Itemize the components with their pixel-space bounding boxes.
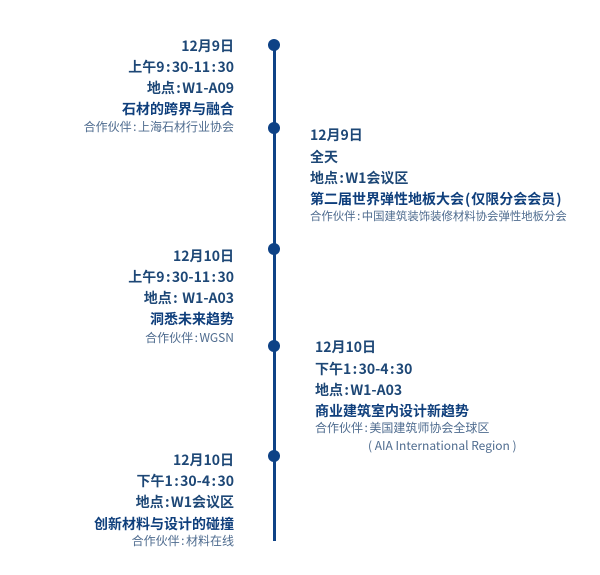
event 5: innovative materials: 合作伙伴:材料在线 bbox=[132, 532, 234, 549]
event 5: innovative materials: 12月10日 bbox=[173, 450, 234, 470]
event 1: stone materials: 地点:W1-A09 bbox=[147, 78, 234, 98]
event 2: elastic flooring conference: 12月9日 bbox=[310, 125, 363, 145]
event 5: innovative materials: 下午1:30-4:30 bbox=[137, 471, 234, 491]
event 5: innovative materials bbox=[94, 450, 234, 549]
event 4: commercial interior design bbox=[315, 337, 517, 454]
event 3: future trends bbox=[128, 246, 234, 346]
event 2: elastic flooring conference: 第二届世界弹性地板大会(仅限分会会员) bbox=[310, 189, 562, 209]
event 1: stone materials: 上午9:30-11:30 bbox=[128, 57, 234, 77]
event 2: elastic flooring conference: 合作伙伴:中国建筑装饰装修材料协会弹性地板分会 bbox=[310, 208, 567, 224]
event 2: elastic flooring conference bbox=[310, 125, 567, 224]
event 1: stone materials: 石材的跨界与融合 bbox=[122, 99, 234, 119]
event 4: commercial interior design: 下午1:30-4:30 bbox=[315, 359, 412, 379]
timeline axis bbox=[273, 44, 276, 541]
event 4: commercial interior design: 商业建筑室内设计新趋势 bbox=[315, 401, 469, 421]
timeline dot 5 bbox=[268, 450, 280, 462]
event 4: commercial interior design: 合作伙伴:美国建筑师协会全球区 bbox=[315, 419, 489, 436]
event 4: commercial interior design: 地点:W1-A03 bbox=[315, 380, 402, 400]
event 3: future trends: 地点: W1-A03 bbox=[144, 288, 234, 308]
event 3: future trends: 12月10日 bbox=[173, 246, 234, 266]
event 3: future trends: 上午9:30-11:30 bbox=[128, 267, 234, 287]
event 3: future trends: 合作伙伴:WGSN bbox=[145, 329, 234, 346]
timeline dot 2 bbox=[268, 122, 280, 134]
event 3: future trends: 洞悉未来趋势 bbox=[150, 309, 234, 329]
event 1: stone materials bbox=[84, 36, 234, 135]
event 2: elastic flooring conference: 地点:W1会议区 bbox=[310, 168, 408, 188]
timeline dot 1 bbox=[268, 39, 280, 51]
event 2: elastic flooring conference: 全天 bbox=[310, 147, 338, 167]
event 4: commercial interior design: 12月10日 bbox=[315, 337, 376, 357]
event 5: innovative materials: 地点:W1会议区 bbox=[136, 492, 234, 512]
event 5: innovative materials: 创新材料与设计的碰撞 bbox=[94, 514, 234, 534]
timeline dot 4 bbox=[268, 340, 280, 352]
timeline dot 3 bbox=[268, 243, 280, 255]
event 4: commercial interior design: ( AIA International Region ) bbox=[368, 437, 517, 454]
event 1: stone materials: 12月9日 bbox=[181, 36, 234, 56]
event 1: stone materials: 合作伙伴:上海石材行业协会 bbox=[84, 118, 234, 135]
